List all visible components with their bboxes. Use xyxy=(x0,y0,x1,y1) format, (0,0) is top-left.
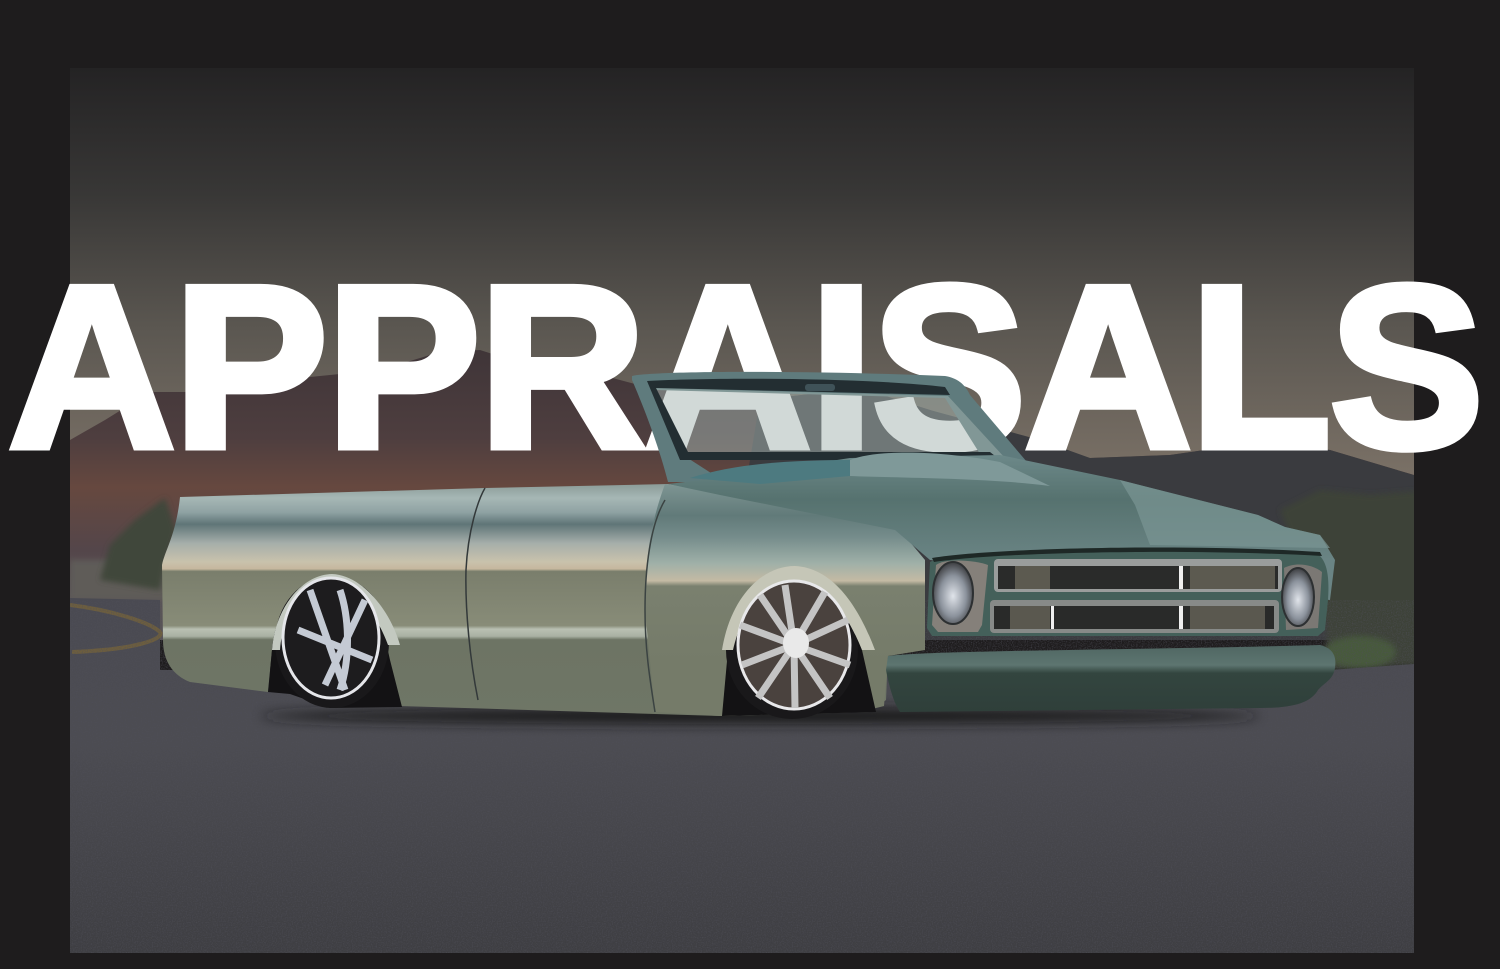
truck shadow xyxy=(260,708,1260,724)
rear-view mirror xyxy=(805,384,835,391)
windshield glass xyxy=(652,388,1005,458)
hood lip shadow xyxy=(932,547,1322,562)
bush green patch xyxy=(1324,636,1396,668)
upper grille bezel xyxy=(994,559,1282,592)
body side xyxy=(162,484,905,716)
front rim xyxy=(738,581,850,709)
title: APPRAISALS xyxy=(8,238,1484,497)
windshield frame xyxy=(632,372,1027,482)
front wheel xyxy=(738,581,850,709)
bush right xyxy=(1325,640,1414,670)
hood bright centre xyxy=(1120,480,1330,548)
front wheel arch xyxy=(722,566,875,650)
left headlight bucket xyxy=(932,560,988,632)
ground xyxy=(70,598,1414,953)
rear tire xyxy=(275,576,389,708)
front tire xyxy=(726,581,858,719)
sky xyxy=(70,68,1414,488)
windshield seal xyxy=(647,379,1000,460)
hood scoop xyxy=(850,453,1050,486)
lower grille bezel xyxy=(990,600,1279,633)
front hub xyxy=(783,628,809,658)
grille surround xyxy=(927,550,1328,636)
windshield xyxy=(632,372,1027,482)
door seam front xyxy=(645,500,665,712)
door seam rear xyxy=(466,488,485,700)
upper grille divider xyxy=(1179,566,1183,589)
lower grille panels xyxy=(1010,606,1265,629)
rear wheel arch xyxy=(272,574,400,650)
mountains left xyxy=(70,350,1414,640)
upper grille opening xyxy=(994,559,1282,592)
roadside verge xyxy=(70,560,162,596)
rear rim xyxy=(283,578,379,698)
front bumper xyxy=(886,645,1335,712)
rear spokes xyxy=(298,590,372,690)
road markings xyxy=(70,605,160,652)
left headlight lens xyxy=(933,562,973,624)
mountains right, in shade xyxy=(720,388,1414,640)
ground texture xyxy=(70,600,1414,953)
rear wheel well xyxy=(268,582,402,708)
lower grille dividers xyxy=(1051,606,1183,629)
upper grille mesh xyxy=(998,566,1278,589)
hood xyxy=(668,455,1335,600)
right headlight bucket xyxy=(1284,565,1322,630)
right headlight xyxy=(1282,565,1322,630)
cowl xyxy=(690,460,855,484)
front fender xyxy=(645,484,925,716)
tree left xyxy=(100,498,176,590)
upper grille panels xyxy=(1015,566,1275,589)
lower grille opening xyxy=(990,600,1279,633)
front wheel well xyxy=(722,578,876,716)
rear wheel xyxy=(283,578,379,698)
lower grille mesh xyxy=(994,606,1274,629)
left headlight xyxy=(932,560,988,632)
front spokes xyxy=(740,585,850,708)
right headlight lens xyxy=(1282,568,1314,626)
truck xyxy=(162,372,1335,719)
